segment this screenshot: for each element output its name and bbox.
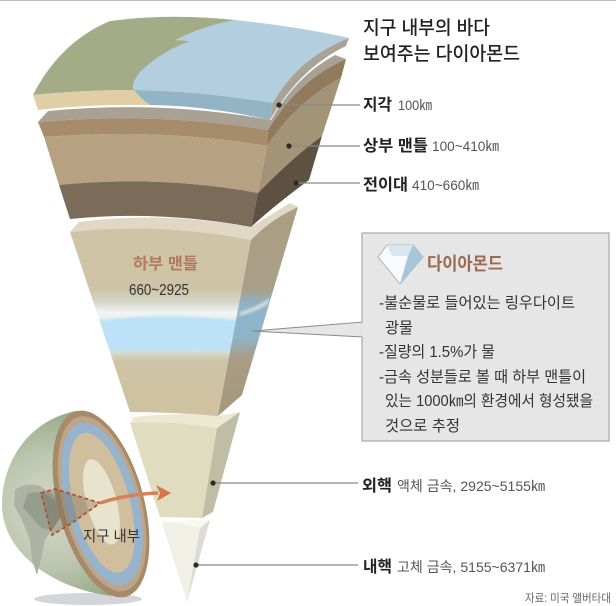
callout body text [379, 294, 593, 435]
inner core layer [162, 520, 210, 602]
inner core: top cap [162, 520, 210, 528]
label: outer core: 외핵 [362, 476, 392, 495]
upper mantle: tan front [44, 134, 267, 193]
icon: diamond [378, 245, 423, 284]
crust layer [33, 17, 349, 120]
lower mantle: top cap [70, 203, 298, 240]
heading: lower mantle: 하부 맨틀 [133, 255, 198, 273]
leader: outer core [210, 480, 358, 486]
callout heading: 다이아몬드 [427, 254, 503, 274]
depth: lower mantle: 660~2925 [129, 282, 189, 299]
lower mantle: white streak on side [239, 298, 270, 316]
lower mantle: water band [90, 316, 245, 351]
globe cutaway [2, 400, 171, 606]
label: upper mantle [363, 137, 499, 155]
globe: dark inland region [23, 492, 62, 530]
globe: cut face rings [35, 400, 167, 606]
outer core layer [130, 412, 240, 518]
globe: sphere [2, 411, 140, 597]
upper mantle layer [38, 55, 346, 193]
label: crust: 지각 [363, 96, 392, 114]
title: 보여주는 다이아몬드 [363, 43, 520, 65]
globe: ground shadow [34, 593, 142, 605]
leader: crust [276, 102, 360, 108]
label: inner core [363, 557, 545, 576]
label: transition zone: 전이대 [363, 176, 408, 194]
label: outer core [362, 476, 545, 495]
title [363, 17, 520, 65]
label: upper mantle: 100~410㎞ [432, 138, 499, 154]
lower mantle: front face [70, 228, 251, 416]
label: outer core: 액체 금속, 2925~5155㎞ [397, 478, 545, 494]
globe: South America [14, 485, 62, 575]
upper mantle: brown band [38, 118, 268, 146]
outer core: top cap [130, 412, 240, 428]
upper mantle: tan side [258, 78, 341, 193]
transition zone: front [59, 181, 258, 227]
leader: inner core [193, 562, 358, 568]
globe: selected wedge [41, 489, 100, 535]
callout panel [362, 233, 609, 441]
inner core: side face [187, 520, 210, 602]
upper mantle: brown band side [267, 59, 346, 146]
label: inner core: 고체 금속, 5155~6371㎞ [397, 559, 545, 575]
callout body text: 광물 [385, 319, 413, 337]
callout body text: 것으로 추정 [385, 417, 460, 435]
title: 지구 내부의 바다 [363, 17, 490, 39]
crust: grey side face [270, 38, 349, 120]
callout: diamond [252, 233, 609, 441]
label: upper mantle: 상부 맨틀 [363, 137, 428, 155]
label: transition zone: 410~660㎞ [412, 177, 479, 193]
callout body text: 있는 1000㎞의 환경에서 형성됐을 [385, 392, 593, 410]
transition zone layer [59, 136, 322, 227]
outer core: front face [130, 422, 217, 518]
outer core: side face [202, 412, 240, 518]
label: crust [363, 96, 432, 114]
label: transition zone [363, 176, 479, 194]
inner core: front face [162, 523, 200, 602]
callout body text: -질량의 1.5%가 물 [379, 343, 495, 361]
crust: green land surface [33, 17, 235, 95]
globe caption: 지구 내부 [83, 528, 140, 545]
crust: sand front face [33, 90, 150, 110]
lower mantle layer [70, 203, 298, 416]
callout body text: -금속 성분들로 볼 때 하부 맨틀이 [379, 368, 586, 386]
transition zone: side [251, 136, 322, 227]
label: crust: 100㎞ [398, 97, 432, 113]
icon: orange arrow [100, 485, 171, 503]
leader: transition zone [293, 180, 360, 186]
crust: ocean front face [134, 90, 273, 120]
leader: upper mantle [286, 143, 360, 149]
callout pointer [252, 322, 363, 337]
lower mantle: side face [218, 207, 298, 416]
callout body text: -불순물로 들어있는 링우다이트 [379, 294, 575, 312]
label: inner core: 내핵 [363, 557, 392, 576]
crust: blue ocean surface [133, 20, 349, 103]
upper mantle: grey top [38, 55, 346, 130]
